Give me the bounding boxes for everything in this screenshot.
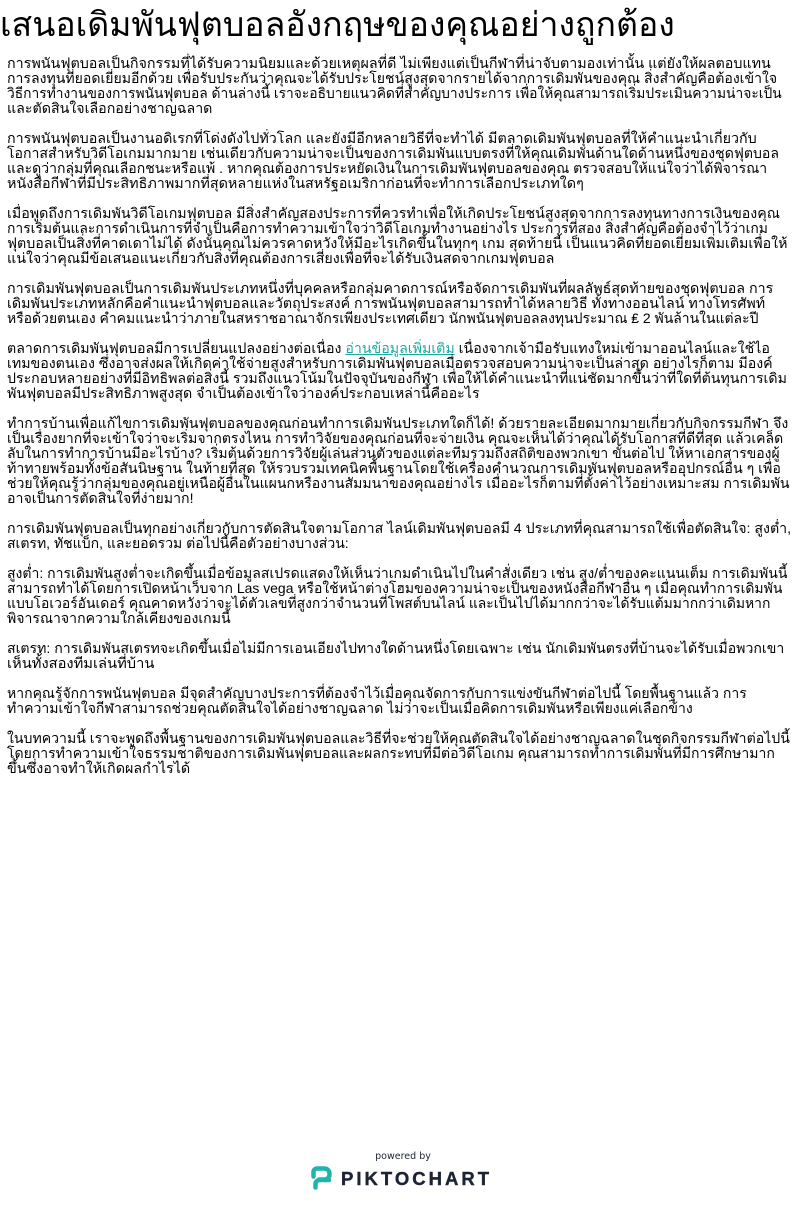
paragraph: homework: ท้าทายพร้อมทั้งข้อสันนิษฐาน ในท้ายที่สุด ให้รวบรวมเทคนิคพื้นฐานโดยใช้เครื่องคำนวณการเดิมพันฟุตบอลหรืออุปกรณ์อื่น ๆ เพื่อ <box>7 460 781 476</box>
paragraph: video game betting: ฟุตบอลเป็นสิ่งที่คาดเดาไม่ได้ ดังนั้นคุณไม่ควรคาดหวังให้มีอะไรเกิดขึ้นในทุกๆ เกม สุดท้ายนี้ เป็นแนวคิดที่ยอดเยี่ยมเพิ่มเติมเพื่อให้ <box>7 235 787 251</box>
paragraph: straight bet: เห็นทั้งสองทีมเล่นที่บ้าน <box>7 655 154 671</box>
paragraph: four line types <box>7 519 791 551</box>
paragraph: introduction: การลงทุนที่ยอดเยี่ยมอีกด้วย เพื่อรับประกันว่าคุณจะได้รับประโยชน์สูงสุดจากรายได้จากการเดิมพันของคุณ สิ่งสำคัญคือต้องเข้าใจ <box>7 70 777 86</box>
paragraph: over under: แบบโอเวอร์อันเดอร์ คุณคาดหวังว่าจะได้ตัวเลขที่สูงกว่าจำนวนที่โพสต์บนไลน์ และเป็นไปได้มากกว่าจะได้รับแต้มมากกว่าเดิมหาก <box>7 595 770 611</box>
paragraph: video game betting: แน่ใจว่าคุณมีข้อเสนอแนะเกี่ยวกับสิ่งที่คุณต้องการเสี่ยงเพื่อที่จะได้รับเงินสดจากเกมฟุตบอล <box>7 250 554 266</box>
paragraph: video game betting <box>7 204 787 267</box>
paragraph: football betting hobby: หนังสือกีฬาที่มีประสิทธิภาพมากที่สุดหลายแห่งในสหรัฐอเมริกาก่อนที่จะทำการเลือกประเภทใดๆ <box>7 175 584 191</box>
paragraph: over under: พิจารณาจากความใกล้เคียงของเกมนี้ <box>7 610 231 626</box>
paragraph: changing market with link: พันฟุตบอลมีประสิทธิภาพสูงสุด จำเป็นต้องเข้าใจว่าองค์ประกอบเหล่านี้คืออะไร <box>7 385 480 401</box>
paragraph: football betting hobby: และดูว่ากลุ่มที่คุณเลือกชนะหรือแพ้ . หากคุณต้องการประหยัดเงินในการเดิมพันฟุตบอลของคุณ ตรวจสอบให้แน่ใจว่าได้พิจารณา <box>7 160 767 176</box>
paragraph: straight bet: สเตรท: การเดิมพันสเตรทจะเกิดขึ้นเมื่อไม่มีการเอนเอียงไปทางใดด้านหนึ่งโดยเฉพาะ เช่น นักเดิมพันตรงที่บ้านจะได้รับเมื่อพวกเขา <box>7 640 784 656</box>
paragraph: introduction: วิธีการทำงานของการพนันฟุตบอล ด้านล่างนี้ เราจะอธิบายแนวคิดที่สำคัญบางประการ เพื่อให้คุณสามารถเริ่มประเมินความน่าจะเป็น <box>7 85 782 101</box>
paragraph: homework: ช่วยให้คุณรู้ว่ากลุ่มของคุณอยู่เหนือผู้อื่นในแผนกหรืองานสัมมนาของคุณอย่างไร เมื่ออะไรก็ตามที่ตั้งค่าไว้อย่างเหมาะสม การเดิมพัน <box>7 475 789 491</box>
paragraph: over under <box>7 563 788 626</box>
paragraph: introduction: การพนันฟุตบอลเป็นกิจกรรมที่ได้รับความนิยมและด้วยเหตุผลที่ดี ไม่เพียงแต่เป็นกีฬาที่น่าจับตามองเท่านั้น แต่ยังให้ผลตอบแทน <box>7 55 771 71</box>
paragraph: football betting hobby <box>7 129 779 192</box>
paragraph: betting types: เดิมพันประเภทหลักคือคำแนะนำฟุตบอลและวัตถุประสงค์ การพนันฟุตบอลสามารถทำได้หลายวิธี ทั้งทางออนไลน์ ทางโทรศัพท์ <box>7 295 765 311</box>
paragraph: straight bet <box>7 638 784 671</box>
paragraph: introduction: และตัดสินใจเลือกอย่างชาญฉลาด <box>7 100 212 116</box>
footer: powered by Piktochart logo <box>311 1151 490 1190</box>
paragraph: homework <box>7 414 790 506</box>
paragraph: conclusion <box>7 728 790 776</box>
paragraph: homework: ทำการบ้านเพื่อแก้ไขการเดิมพันฟุตบอลของคุณก่อนทำการเดิมพันประเภทใดก็ได้! ด้วยรายละเอียดมากมายเกี่ยวกับกิจกรรมกีฬา จึง <box>7 415 788 431</box>
paragraph: betting types: หรือด้วยตนเอง คำคมแนะนำว่าภายในสหราชอาณาจักรเพียงประเทศเดียว นักพนันฟุตบอลลงทุนประมาณ ₤ 2 พันล้านในแต่ละปี <box>7 310 758 326</box>
paragraph: conclusion: โดยการทำความเข้าใจธรรมชาติของการเดิมพันฟุตบอลและผลกระทบที่มีต่อวิดีโอเกม คุณสามารถทำการเดิมพันที่มีการศึกษามาก <box>7 745 775 761</box>
paragraph: changing market with link <box>7 339 787 402</box>
paragraph: video game betting: การเริ่มต้นและการดำเนินการที่จำเป็นคือการทำความเข้าใจว่าวิดีโอเกมทำงานอย่างไร ประการที่สอง สิ่งสำคัญคือต้องจำไว้ว่าเกม <box>7 220 768 236</box>
paragraph: betting types <box>7 279 773 327</box>
paragraph: over under: สูงต่ำ: การเดิมพันสูงต่ำจะเกิดขึ้นเมื่อข้อมูลสเปรดแสดงให้เห็นว่าเกมดำเนินไปในคำสั่งเดียว เช่น สูง/ต่ำของคะแนนเต็ม การเดิมพันนี้ <box>7 565 787 581</box>
paragraph: key points: หากคุณรู้จักการพนันฟุตบอล มีจุดสำคัญบางประการที่ต้องจำไว้เมื่อคุณจัดการกับการแข่งขันกีฬาต่อไปนี้ โดยพื้นฐานแล้ว การ <box>7 685 747 701</box>
paragraph: changing market with link: ตลาดการเดิมพันฟุตบอลมีการเปลี่ยนแปลงอย่างต่อเนื่อง อ่านข้อมูลเพิ่มเติม เนื่องจากเจ้ามือรับแทงใหม่เข้ามาออนไลน์และใช้ไอ <box>7 340 770 356</box>
paragraph: key points: ทำความเข้าใจกีฬาสามารถช่วยคุณตัดสินใจได้อย่างชาญฉลาด ไม่ว่าจะเป็นเมื่อคิดการเดิมพันหรือเพียงแค่เลือกข้าง <box>7 700 693 716</box>
title: เสนอเดิมพันฟุตบอลอังกฤษของคุณอย่างถูกต้อง <box>0 6 675 44</box>
paragraph: football betting hobby: การพนันฟุตบอลเป็นงานอดิเรกที่โด่งดังไปทั่วโลก และยังมีอีกหลายวิธีที่จะทำได้ มีตลาดเดิมพันฟุตบอลที่ให้คำแนะนำเกี่ยวกับ <box>7 130 757 146</box>
paragraph: betting types: การเดิมพันฟุตบอลเป็นการเดิมพันประเภทหนึ่งที่บุคคลหรือกลุ่มคาดการณ์หรือจัดการเดิมพันที่ผลลัพธ์สุดท้ายของชุดฟุตบอล การ <box>7 280 773 296</box>
paragraph: four line types: สเตรท, ทัชแบ็ก, และยอดรวม ต่อไปนี้คือตัวอย่างบางส่วน: <box>7 535 349 551</box>
article body text <box>7 53 791 776</box>
Piktochart wordmark: PIKTOCHART <box>341 1168 490 1189</box>
icon: Piktochart mark <box>314 1168 330 1188</box>
paragraph: key points <box>7 683 747 717</box>
paragraph: conclusion: ขึ้นซึ่งอาจทำให้เกิดผลกำไรได้ <box>7 760 190 776</box>
paragraph: changing market with link: ประกอบหลายอย่างที่มีอิทธิพลต่อสิ่งนี้ รวมถึงแนวโน้มในปัจจุบันของกีฬา เพื่อให้ได้คำแนะนำที่แน่ชัดมากขึ้นว่าที่ใดที่ต้นทุนการเดิม <box>7 370 787 386</box>
paragraph: homework: ลับในการทำการบ้านมีอะไรบ้าง? เริ่มต้นด้วยการวิจัยผู้เล่นส่วนตัวของแต่ละทีมรวมถึงสถิติของพวกเขา ขั้นต่อไป ให้หาเอกสารของผู้ <box>7 445 780 461</box>
paragraph: video game betting: เมื่อพูดถึงการเดิมพันวิดีโอเกมฟุตบอล มีสิ่งสำคัญสองประการที่ควรทำเพื่อให้เกิดประโยชน์สูงสุดจากการลงทุนทางการเงินของคุณ <box>7 205 780 221</box>
paragraph: conclusion: ในบทความนี้ เราจะพูดถึงพื้นฐานของการเดิมพันฟุตบอลและวิธีที่จะช่วยให้คุณตัดสินใจได้อย่างชาญฉลาดในชุดกิจกรรมกีฬาต่อไปนี้ <box>7 730 790 746</box>
paragraph: homework: อาจเป็นการตัดสินใจที่ง่ายมาก! <box>7 490 194 506</box>
paragraph: over under: สามารถทำได้โดยการเปิดหน้าเว็บจาก Las vega หรือใช้หน้าต่างโฮมของความน่าจะเป็นของหนังสือกีฬาอื่น ๆ เมื่อคุณทำการเดิมพัน <box>7 580 782 596</box>
paragraph: homework: เป็นเรื่องยากที่จะเข้าใจว่าจะเริ่มจากตรงไหน การทำวิจัยของคุณก่อนที่จะจ่ายเงิน คุณจะเห็นได้ว่าคุณได้รับโอกาสที่ดีที่สุด แล้วเคล็ด <box>7 430 783 446</box>
paragraph: four line types: การเดิมพันฟุตบอลเป็นทุกอย่างเกี่ยวกับการตัดสินใจตามโอกาส ไลน์เดิมพันฟุตบอลมี 4 ประเภทที่คุณสามารถใช้เพื่อตัดสินใจ: สูงต่ำ, <box>7 520 791 536</box>
paragraph: introduction <box>7 53 782 116</box>
paragraph: changing market with link: เทมของตนเอง ซึ่งอาจส่งผลให้เกิดค่าใช้จ่ายสูงสำหรับการเดิมพันฟุตบอลเมื่อตรวจสอบความน่าจะเป็นล่าสุด อย่างไรก็ตาม มีองค์ <box>7 355 773 371</box>
paragraph: football betting hobby: โอกาสสำหรับวิดีโอเกมมากมาย เช่นเดียวกับความน่าจะเป็นของการเดิมพันแบบตรงที่ให้คุณเดิมพันด้านใดด้านหนึ่งของชุดฟุตบอล <box>7 145 779 161</box>
powered by label: powered by <box>375 1151 431 1162</box>
